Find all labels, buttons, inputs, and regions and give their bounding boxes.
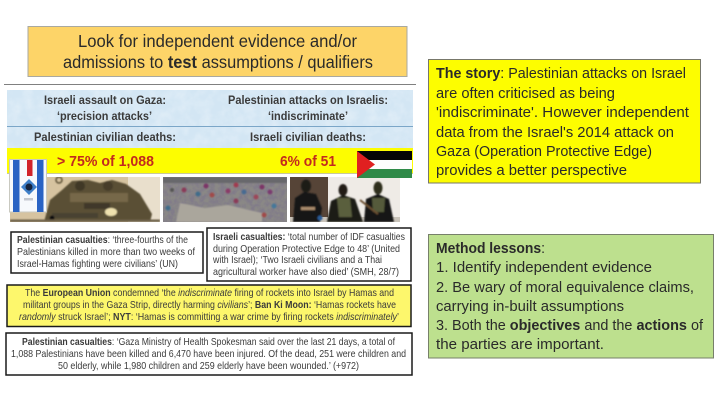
panel: the story: The story: Palestinian attacks on Israel: [436, 66, 686, 82]
panel: comparison headings: ‘precision attacks’: [57, 109, 152, 123]
text box: EU, Ban Ki Moon and NYT quotes: The European Union condemned ‘the indiscriminate firing of rockets into Israel by Hamas and: [25, 288, 394, 299]
text box: EU, Ban Ki Moon and NYT quotes: [7, 285, 411, 326]
panel: yellow death statistics: 6% of 51: [280, 153, 336, 170]
panel: method lessons: carrying in-built assumptions: [436, 299, 624, 315]
panel: the story: Gaza (Operation Protective Edge): [436, 144, 652, 160]
text box: Palestinian casualties UN quote: Palestinians killed in more than two weeks of: [17, 247, 195, 258]
panel: comparison headings: Israeli civilian deaths:: [250, 130, 366, 144]
panel: yellow death statistics: > 75% of 1,088: [57, 153, 154, 170]
panel: the story: 'indiscriminate'. However independent: [436, 105, 689, 121]
panel: method lessons: the parties are important.: [436, 337, 604, 353]
text box: Palestinian casualties UN quote: Palestinian casualties: ‘three-fourths of the: [17, 235, 188, 246]
panel: the story: provides a better perspective: [436, 163, 627, 179]
panel: yellow death statistics: [7, 148, 413, 174]
text box: Israeli casualties quote: during Operation Protective Edge to 48’ (United: [213, 244, 400, 255]
panel: method lessons: 2. Be wary of moral equivalence claims,: [436, 280, 694, 296]
panel: comparison headings: Palestinian attacks on Israelis:: [228, 93, 388, 107]
text box: Palestinian casualties UN quote: [11, 232, 203, 273]
text box: Israeli casualties quote: Israeli casualties: ‘total number of IDF casualties: [213, 232, 405, 243]
title banner: [28, 26, 407, 76]
image: three armed fighters: [290, 177, 400, 222]
text box: Palestinian casualties UN quote: Israel-Hamas fighting were civilians’ (UN): [17, 259, 178, 270]
text box: Gaza Ministry of Health quote: 50 elderly, while 1,980 children and 259 elderly have been wounded.’ (+972): [58, 361, 359, 372]
text box: Gaza Ministry of Health quote: Palestinian casualties: ‘Gaza Ministry of Health Spokesman said over the last 21 days, a total of: [22, 337, 395, 348]
icon: altered Israeli flag: [10, 160, 46, 212]
text box: Israeli casualties quote: agricultural worker have also died’ (SMH, 28/7): [213, 267, 399, 278]
text box: Israeli casualties quote: [207, 228, 411, 281]
panel: the story: are often criticised as being: [436, 86, 615, 102]
title banner: admissions to test assumptions / qualifiers: [63, 52, 373, 72]
panel: method lessons: 1. Identify independent evidence: [436, 260, 652, 276]
text box: Gaza Ministry of Health quote: 1,088 Palestinians have been killed and 6,470 have been injured. Of the dead, 251 were children and: [11, 349, 406, 360]
image: tank: [10, 177, 160, 222]
panel: comparison headings: Israeli assault on Gaza:: [44, 93, 166, 107]
image: bombed building rubble: [163, 177, 287, 222]
text box: EU, Ban Ki Moon and NYT quotes: militant groups in the Gaza Strip, directly harming civilians’; Ban Ki Moon: ‘Hamas rockets have: [23, 300, 396, 311]
panel: method lessons: [428, 234, 714, 358]
title banner: Look for independent evidence and/or: [78, 31, 357, 51]
panel: comparison headings: Palestinian civilian deaths:: [34, 130, 176, 144]
text box: Israeli casualties quote: with Israel); ‘Two Israeli civilians and a Thai: [212, 255, 382, 266]
panel: the story: [428, 60, 700, 183]
panel: comparison headings: [7, 90, 413, 150]
text box: Gaza Ministry of Health quote: [6, 333, 412, 375]
panel: method lessons: Method lessons:: [436, 241, 545, 257]
panel: the story: data from the Israel's 2014 attack on: [436, 125, 674, 141]
text box: EU, Ban Ki Moon and NYT quotes: randomly struck Israel’; NYT: ‘Hamas is committing a war crime by firing rockets indiscriminately’: [19, 312, 399, 323]
panel: comparison headings: ‘indiscriminate’: [268, 109, 348, 123]
panel: method lessons: 3. Both the objectives and the actions of: [436, 318, 704, 334]
icon: Palestinian flag: [357, 151, 412, 178]
